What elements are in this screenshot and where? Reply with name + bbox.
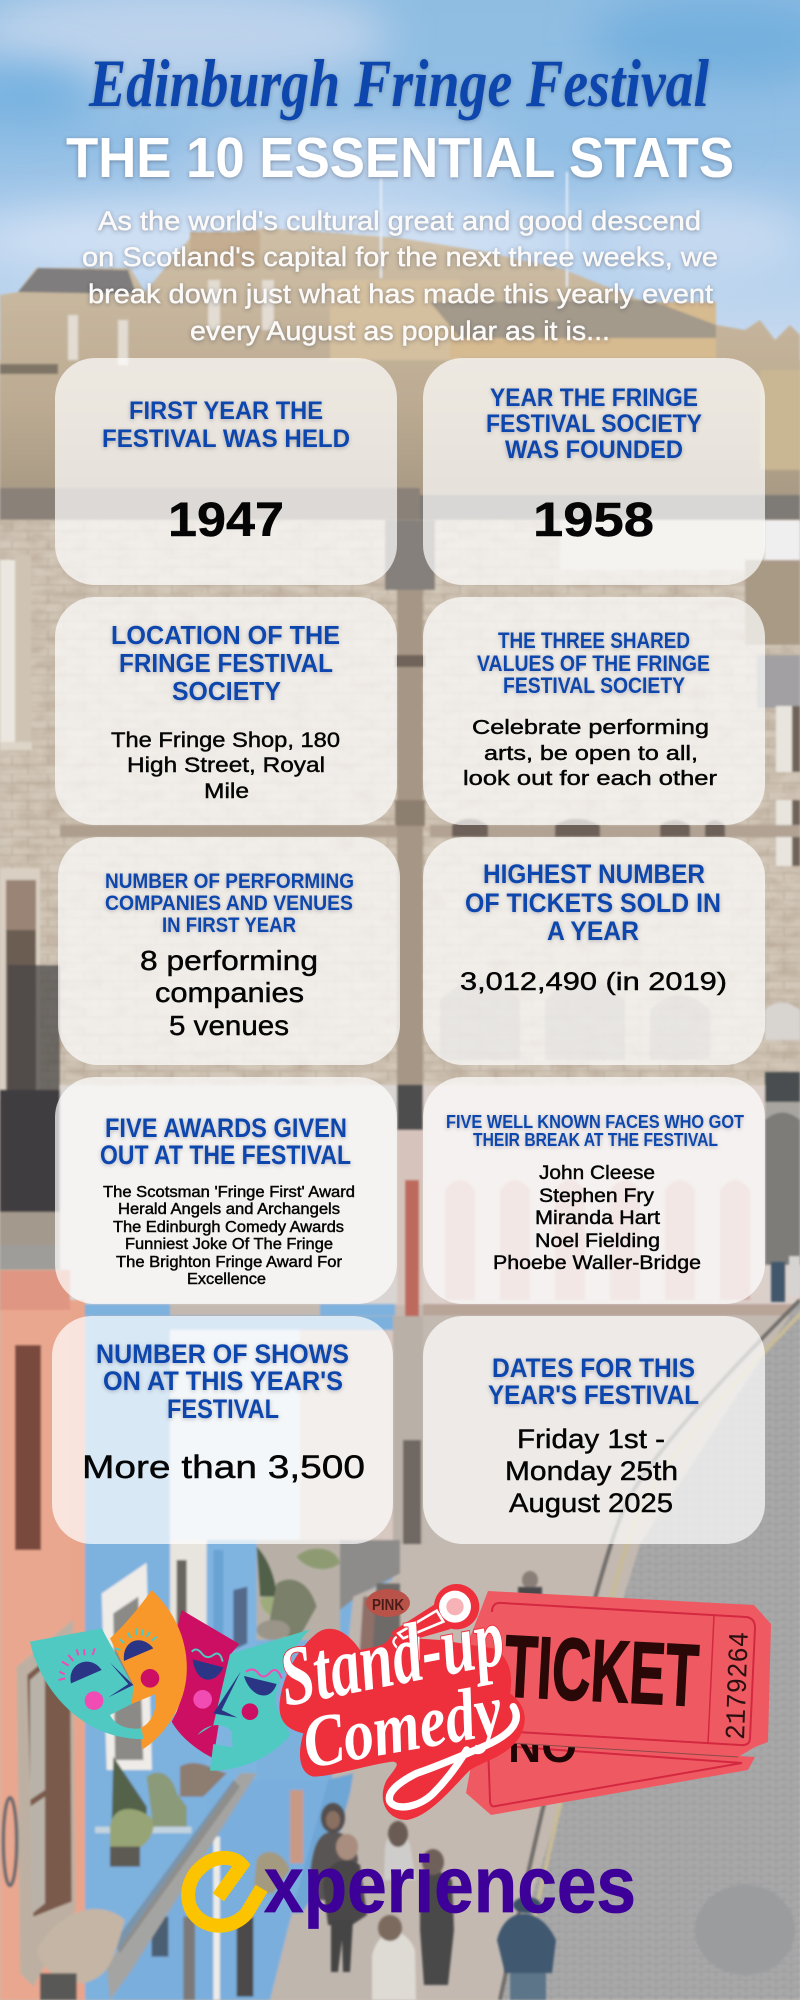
value: faces list: John Cleese	[539, 1162, 655, 1184]
heading: society founded: YEAR THE FRINGE	[490, 384, 698, 412]
heading: number of shows: NUMBER OF SHOWS	[96, 1339, 349, 1369]
heading: awards: OUT AT THE FESTIVAL	[100, 1140, 351, 1170]
heading: dates: YEAR'S FESTIVAL	[488, 1380, 699, 1410]
value: awards list	[103, 1184, 355, 1288]
heading: location: LOCATION OF THE	[111, 620, 340, 650]
value: awards list: Excellence	[187, 1271, 266, 1288]
sign: PINK pub: PINK	[372, 1597, 404, 1614]
panel: tickets sold	[423, 837, 765, 1065]
heading: tickets sold: A YEAR	[547, 916, 639, 946]
value: tickets sold: 3,012,490 (in 2019)	[460, 968, 727, 996]
value: address: High Street, Royal	[127, 754, 325, 777]
panel: society founded	[423, 358, 765, 585]
value: companies and venues	[140, 945, 318, 1041]
heading: location	[111, 620, 340, 706]
value: dates: August 2025	[509, 1488, 673, 1518]
value: address	[111, 729, 340, 803]
value: awards list: The Edinburgh Comedy Awards	[113, 1219, 344, 1236]
bottom buildings drawn at zoom scale	[3, 1540, 400, 2000]
value: dates	[505, 1424, 678, 1518]
heading: shared values	[477, 628, 710, 698]
heading: companies and venues	[105, 870, 354, 937]
value: dates: Friday 1st -	[517, 1424, 665, 1454]
logo: stand-up comedy with microphone	[272, 1584, 525, 1820]
heading: dates	[488, 1353, 699, 1410]
value: faces list: Miranda Hart	[535, 1207, 661, 1229]
value: address: The Fringe Shop, 180	[111, 729, 340, 752]
heading: companies and venues: NUMBER OF PERFORMING	[105, 870, 354, 893]
heading: society founded: WAS FOUNDED	[505, 436, 683, 464]
intro paragraph: every August as popular as it is...	[190, 316, 610, 346]
value: 1958: 1958	[533, 494, 654, 547]
panel: awards	[55, 1077, 397, 1304]
heading: location: SOCIETY	[172, 676, 281, 706]
heading: number of shows: ON AT THIS YEAR'S	[103, 1366, 343, 1396]
panel: number of shows	[52, 1316, 393, 1544]
stand-up lettering: Stand-up	[272, 1590, 511, 1725]
heading: shared values: VALUES OF THE FRINGE	[477, 651, 710, 676]
value: faces list: Phoebe Waller-Bridge	[493, 1252, 701, 1274]
value: faces list: Noel Fielding	[535, 1230, 660, 1252]
stone building	[0, 520, 800, 1100]
ticket stub text: NO	[508, 1720, 577, 1772]
pedestrians on street	[310, 1571, 556, 2000]
heading: awards	[100, 1113, 351, 1170]
logo: experiences	[188, 1840, 636, 1929]
value: dates: Monday 25th	[505, 1456, 678, 1486]
panel: well known faces	[423, 1077, 765, 1304]
street scene upper half	[0, 1072, 800, 2000]
value: awards list: Herald Angels and Archangels	[118, 1201, 340, 1218]
panel: companies and venues	[58, 837, 400, 1065]
icon: red ticket	[466, 1591, 771, 1815]
heading: well known faces: FIVE WELL KNOWN FACES WHO GOT	[446, 1111, 745, 1132]
icon: yellow e	[188, 1858, 262, 1926]
value: faces list	[493, 1162, 701, 1274]
intro paragraph: break down just what has made this yearly event	[88, 279, 714, 309]
heading: tickets sold: OF TICKETS SOLD IN	[465, 888, 721, 918]
heading: society founded	[486, 384, 702, 464]
comedy lettering: Comedy	[297, 1669, 509, 1785]
heading: first year: FESTIVAL WAS HELD	[102, 425, 350, 453]
value: values: look out for each other	[463, 767, 717, 790]
heading: first year	[102, 397, 350, 453]
heading: companies and venues: IN FIRST YEAR	[162, 914, 296, 937]
panel: location	[55, 597, 397, 825]
intro paragraph	[82, 206, 718, 346]
heading: awards: FIVE AWARDS GIVEN	[105, 1113, 347, 1143]
heading: shared values: THE THREE SHARED	[498, 628, 690, 653]
heading: shared values: FESTIVAL SOCIETY	[503, 673, 685, 698]
value: address: Mile	[204, 780, 249, 803]
value: values: arts, be open to all,	[484, 742, 698, 765]
heading: tickets sold	[465, 859, 721, 946]
value: awards list: Funniest Joke Of The Fringe	[125, 1236, 333, 1253]
subtitle: the 10 essential stats: THE 10 ESSENTIAL STATS	[66, 126, 734, 190]
heading: society founded: FESTIVAL SOCIETY	[486, 410, 702, 438]
value: 1947: 1947	[168, 494, 284, 547]
heading: companies and venues: COMPANIES AND VENUES	[105, 892, 353, 915]
icon: theatre masks	[30, 1590, 310, 1771]
panel: dates	[423, 1316, 765, 1544]
value: companies and venues: 5 venues	[169, 1010, 289, 1041]
value: number of shows: More than 3,500	[82, 1449, 365, 1485]
value: awards list: The Scotsman 'Fringe First' Award	[103, 1184, 355, 1201]
castle	[0, 172, 800, 522]
wordmark: xperiences	[264, 1840, 636, 1929]
value: values: Celebrate performing	[472, 716, 709, 739]
street scene lower half	[0, 1256, 800, 2000]
heading: location: FRINGE FESTIVAL	[119, 648, 333, 678]
value: awards list: The Brighton Fringe Award For	[116, 1254, 342, 1271]
icon: microphone	[393, 1584, 479, 1660]
heading: number of shows: FESTIVAL	[167, 1394, 279, 1424]
y swash	[389, 1707, 516, 1807]
heading: tickets sold: HIGHEST NUMBER	[483, 859, 705, 889]
red badge backing	[279, 1629, 525, 1820]
intro paragraph: As the world's cultural great and good descend	[98, 206, 701, 236]
intro paragraph: on Scotland's capital for the next three weeks, we	[82, 242, 718, 272]
panel: shared values	[423, 597, 765, 825]
value: faces list: Stephen Fry	[539, 1185, 654, 1207]
heading: well known faces	[446, 1111, 745, 1150]
heading: well known faces: THEIR BREAK AT THE FESTIVAL	[473, 1129, 718, 1150]
heading: number of shows	[96, 1339, 349, 1424]
value: companies and venues: companies	[155, 977, 304, 1008]
heading: first year: FIRST YEAR THE	[129, 397, 323, 425]
sign: PINK pub	[366, 1589, 410, 1617]
ticket number: 2179264	[722, 1631, 757, 1740]
sky with clouds	[0, 0, 800, 360]
value: companies and venues: 8 performing	[140, 945, 318, 976]
value: values	[463, 716, 717, 790]
heading: dates: DATES FOR THIS	[492, 1353, 695, 1383]
panel: first year	[55, 358, 397, 585]
